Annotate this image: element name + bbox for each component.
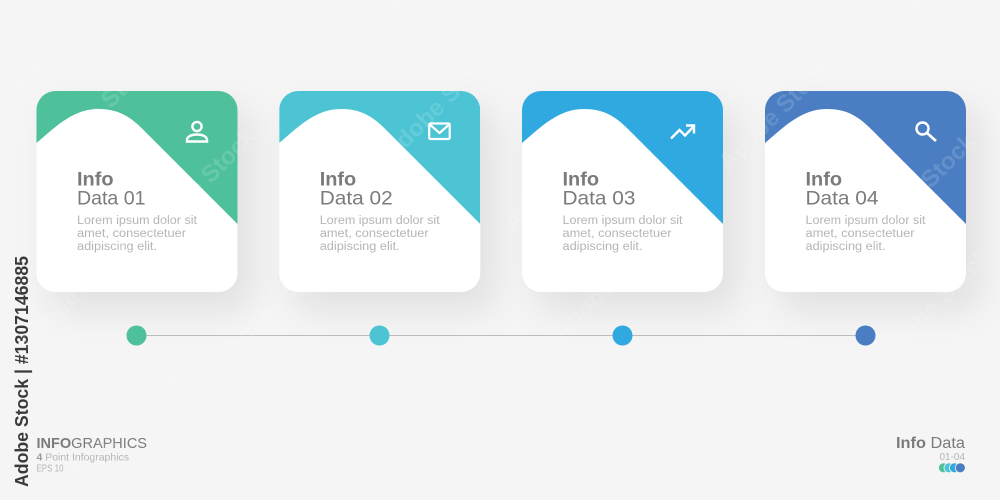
icon: trending arrow [671,126,694,138]
card 04 body text [806,215,926,253]
card 03 heading: Info [562,168,599,190]
card 04 body text: amet, consectetuer [806,228,915,240]
watermark pattern: Adobe [759,419,831,491]
watermark pattern: Adobe [219,419,291,491]
watermark pattern: Adobe Stock [498,113,622,236]
panel: card 02 [279,91,480,292]
card 01 subheading: Data 01 [77,188,146,210]
timeline dot 03 [612,326,632,346]
icon: magnifier [916,122,936,141]
footer right dots [938,463,965,473]
card 03 body text: Lorem ipsum dolor sit [562,215,683,227]
card 02 heading: Info [320,168,356,190]
watermark pattern: Adobe Stock [138,123,262,246]
card 03 colour header [522,91,723,224]
card 01 colour header [36,91,238,224]
card 02 body text: adipiscing elit. [320,241,400,253]
card 01 body text [77,215,198,253]
card 04 heading: Info [806,168,842,190]
timeline dot 02 [370,326,390,346]
card 01 body text: adipiscing elit. [77,241,157,253]
watermark pattern: Adobe Stock [678,328,802,451]
card 03 body text: amet, consectetuer [562,228,672,240]
watermark pattern: Adobe Stock [383,353,507,476]
watermark pattern: Adobe Stock [38,48,162,171]
card 01 body text: amet, consectetuer [77,228,186,240]
card 02 body text: Lorem ipsum dolor sit [320,215,441,227]
watermark pattern: Adobe Stock [713,53,837,176]
card 02 colour header [279,91,480,224]
icon: envelope [429,124,450,139]
panel: card 01 [36,91,238,292]
card 03 body text [562,215,683,253]
footer right range: 01-04 [940,452,965,463]
watermark pattern: Adobe Stock [13,233,137,356]
card 04 body text: adipiscing elit. [806,241,886,253]
card 02 subheading: Data 02 [320,188,393,210]
watermark pattern: Adobe Stock [63,363,187,486]
icon: person [187,122,207,142]
card 04 subheading: Data 04 [806,188,879,210]
card 01 body text: Lorem ipsum dolor sit [77,215,198,227]
watermark pattern: Adobe [559,419,631,491]
card 03 body text: adipiscing elit. [562,241,642,253]
watermark pattern: Adobe Stock [378,43,502,166]
watermark pattern: Adobe Stock [218,238,342,361]
card 01 heading: Info [77,168,114,190]
card 02 body text [320,215,441,253]
timeline dot 01 [126,326,146,346]
panel: card 03 [522,91,723,292]
card 02 body text: amet, consectetuer [320,228,429,240]
card 03 subheading: Data 03 [562,188,636,210]
footer left subtitle: 4 Point Infographics [36,452,129,464]
timeline dot 04 [856,326,876,346]
card 04 body text: Lorem ipsum dolor sit [806,215,926,227]
footer right: info data [896,435,965,473]
watermark pattern: Adobe Stock [548,223,672,346]
stock id side text: Adobe Stock | #1307146885 [11,256,32,487]
panel: card 04 [765,91,966,292]
footer left: infographics title: INFOGRAPHICS [36,435,147,452]
infographic canvas [14,91,985,486]
footer left EPS note: EPS 10 [36,464,64,474]
footer left: infographics title [36,435,147,474]
footer right: info data: Info Data [896,435,965,452]
watermark pattern: Adobe Stock [858,128,982,251]
card 04 colour header [765,91,966,224]
timeline [126,326,876,346]
watermark pattern: Adobe Stock [873,243,997,366]
